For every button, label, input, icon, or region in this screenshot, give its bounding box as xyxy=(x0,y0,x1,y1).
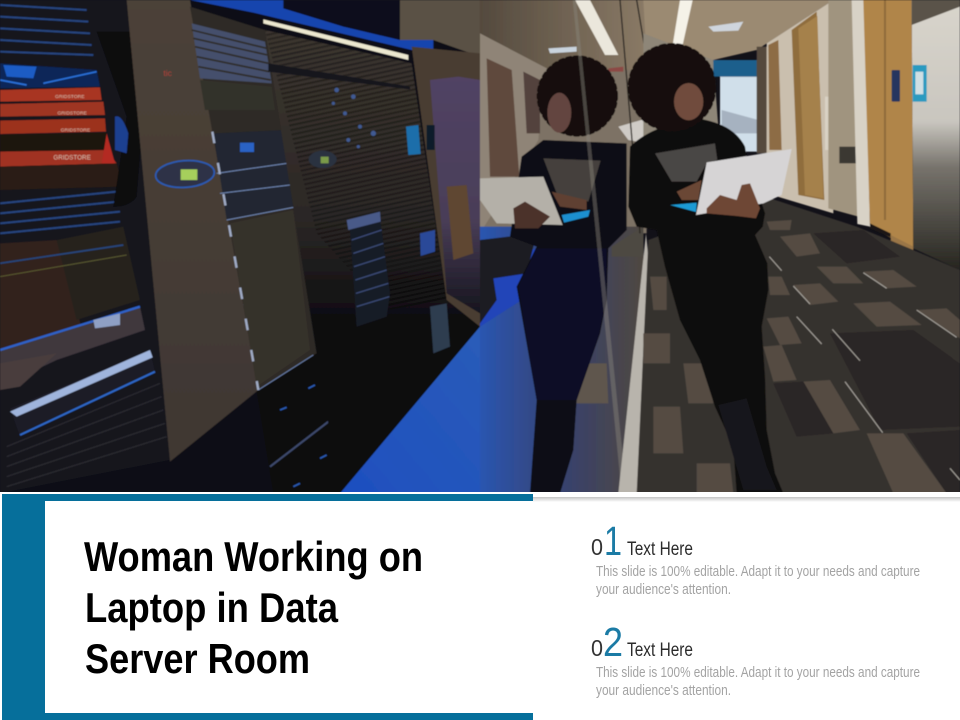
photo: woman with laptop beside server room glass wall xyxy=(0,0,960,493)
reflected corridor xyxy=(480,0,647,233)
far-left rack with red units: GRIDSTORE xyxy=(57,111,88,117)
body silhouette xyxy=(628,118,783,493)
heading: title: Laptop in Data xyxy=(85,584,339,631)
right wall and doors xyxy=(767,0,960,270)
text block: item 02: 0 xyxy=(591,635,603,661)
blue screen edge xyxy=(670,203,697,212)
text block: item 02: your audience's attention. xyxy=(596,682,731,699)
far cabinets with purple stripes xyxy=(406,47,480,327)
tan pillar with control display xyxy=(127,0,258,462)
reflected woman xyxy=(480,58,627,493)
text block: item 01: 1 xyxy=(604,518,622,564)
server racks behind glass xyxy=(0,0,480,493)
top blue band and light strip xyxy=(190,0,480,89)
shirt print xyxy=(655,143,717,182)
tan pillar with control display: tic xyxy=(163,68,173,78)
forearm xyxy=(677,180,702,200)
text block: item 01: Text Here xyxy=(627,538,693,560)
heading: title: Woman Working on xyxy=(84,533,423,580)
far-left rack with red units: GRIDSTORE xyxy=(55,94,85,100)
dark rounded reflection with blue glyph xyxy=(96,32,140,207)
panel: title card with teal frame xyxy=(2,494,533,720)
blue reflected floor xyxy=(340,327,480,493)
text block: item 01: 0 xyxy=(591,534,603,560)
text block: item 02 xyxy=(591,619,920,699)
tablet xyxy=(696,149,792,215)
reflected floor xyxy=(480,227,643,493)
woman leaning on glass xyxy=(628,46,792,493)
hair xyxy=(631,46,713,129)
shadow line: right header rule xyxy=(533,497,960,502)
middle rack xyxy=(190,7,317,390)
black lower rack units xyxy=(256,354,344,492)
carpet floor xyxy=(637,197,960,493)
text block: item 01: your audience's attention. xyxy=(596,581,731,598)
ceiling and far end of corridor xyxy=(643,0,833,153)
heading: title: Server Room xyxy=(85,635,310,682)
heading: title xyxy=(84,533,423,682)
boot highlight xyxy=(718,398,777,490)
text block: item 01 xyxy=(591,518,920,598)
glass pane edges and white strip xyxy=(573,0,649,493)
text block: item 02: Text Here xyxy=(627,639,693,661)
far-left rack with red units: GRIDSTORE xyxy=(61,127,91,133)
right server cabinets xyxy=(265,30,480,493)
right side corridor xyxy=(480,0,960,493)
far-left rack with red units xyxy=(0,0,170,493)
text block: item 02: 2 xyxy=(603,619,623,665)
hand xyxy=(707,183,760,218)
face xyxy=(674,83,703,120)
far-left rack with red units: GRIDSTORE xyxy=(53,154,91,161)
